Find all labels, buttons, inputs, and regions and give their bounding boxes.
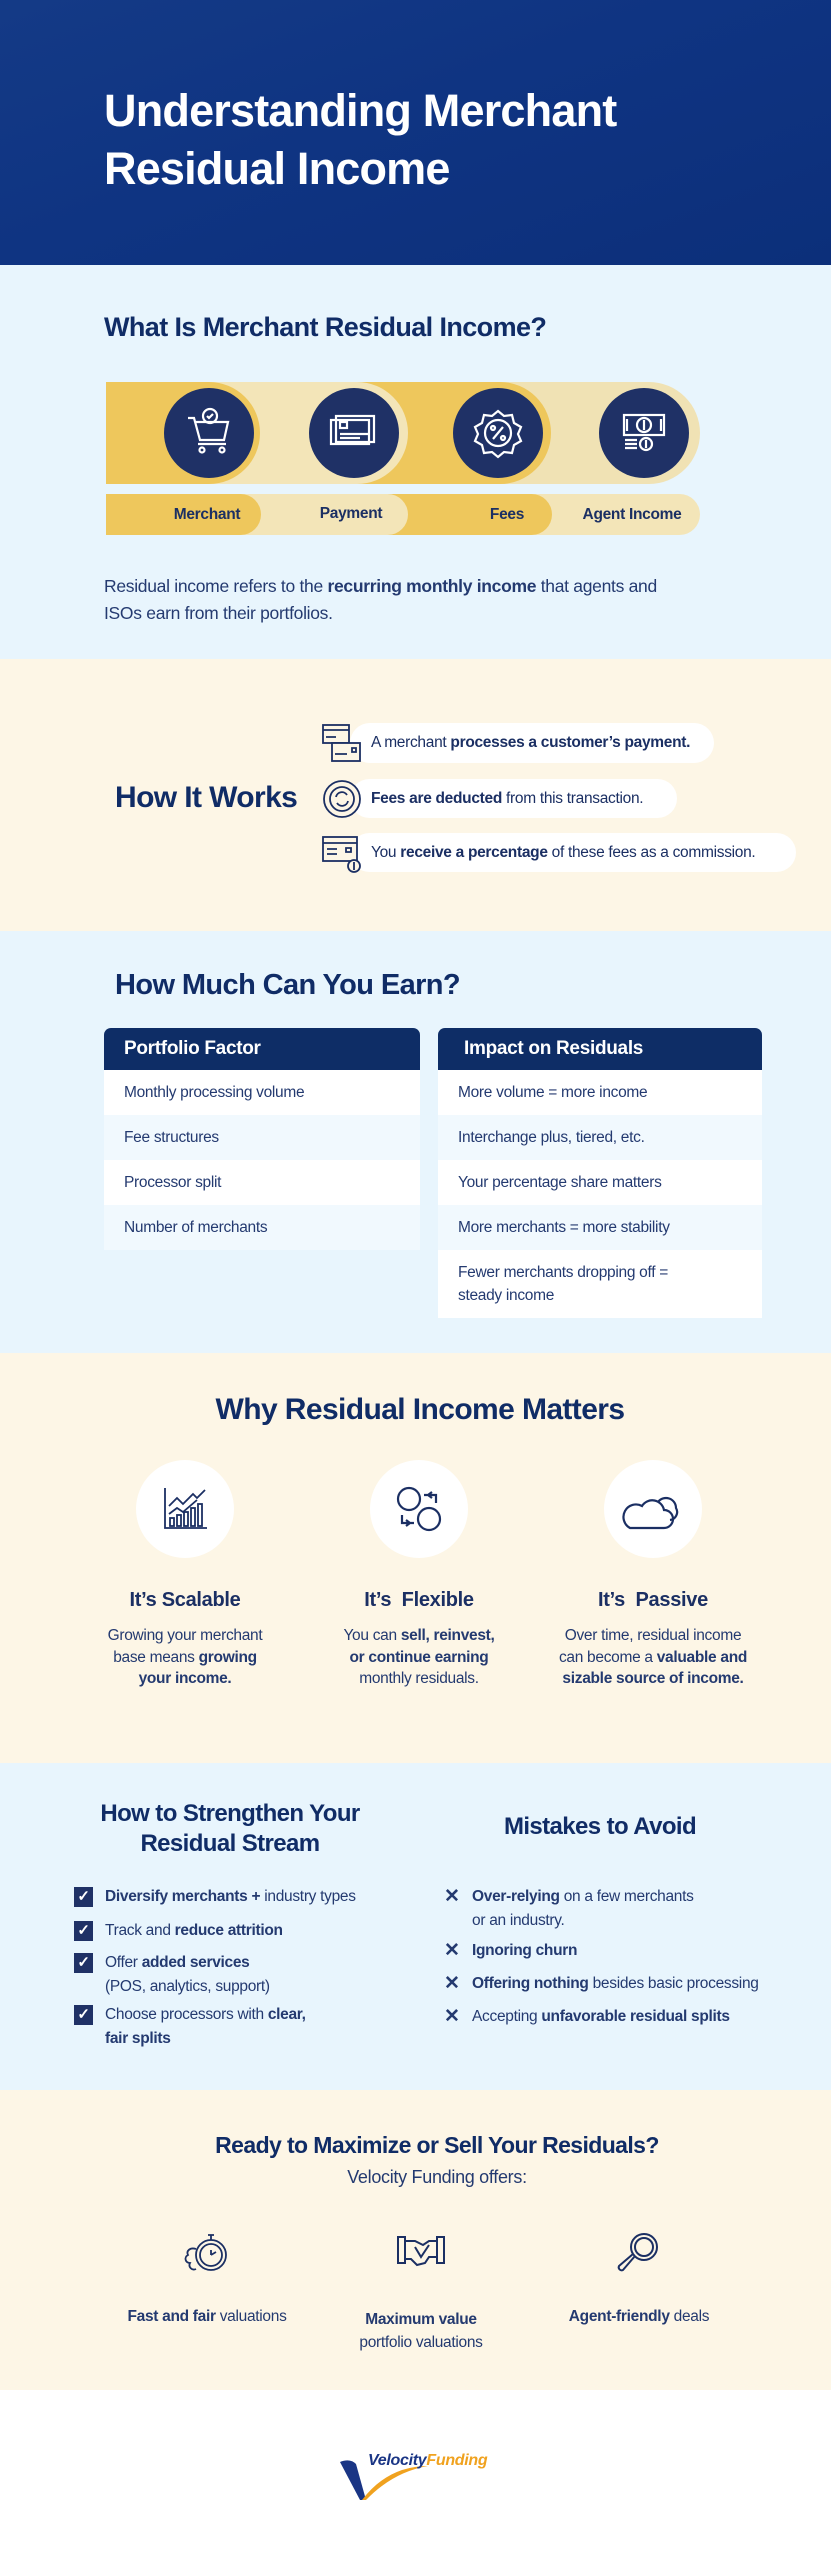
check item 4: fair splits [105,2030,171,2047]
heading: strengthen [100,1800,360,1857]
mistake 4: ✕ [444,2006,460,2027]
heading: Why Residual Income Matters [216,1393,624,1426]
icon: exchange circles [370,1460,468,1558]
mistake 1 [444,1886,694,1929]
table: portfolio factor: Number of merchants [124,1218,267,1236]
offer: fast: Fast and fair valuations [127,2308,287,2325]
card: scalable: base means growing [113,1648,257,1666]
table: impact on residuals: More volume = more income [458,1084,647,1100]
card: flexible: It’s Flexible [364,1589,474,1611]
card: passive: sizable source of income. [562,1670,744,1687]
label: fees: Fees [490,506,524,523]
mistake 2 [444,1940,577,1961]
offer: agent-friendly [569,2233,709,2325]
heading: mistakes: Mistakes to Avoid [504,1813,696,1840]
icon: handshake [397,2236,445,2266]
section: strengthen & mistakes [0,1763,831,2090]
check item 3: Offer added services [105,1954,250,1971]
icon: cards [322,724,361,762]
cta heading: Ready to Maximize or Sell Your Residuals? [215,2132,659,2158]
table: impact on residuals: Your percentage share matters [458,1174,662,1190]
step 3 [322,833,796,873]
heading: strengthen: Residual Stream [140,1830,320,1857]
header banner [0,0,831,265]
table: impact on residuals: Fewer merchants dropping off = [458,1264,668,1281]
table: impact on residuals [438,1028,762,1318]
mistake 2: Ignoring churn [472,1942,577,1959]
label band [106,494,700,535]
step 3: You receive a percentage of these fees as a commission. [371,844,755,861]
step 2 [323,779,677,818]
icon: money [599,388,689,478]
offer: fast [127,2234,287,2325]
offer: agent-friendly: Agent-friendly deals [569,2308,709,2325]
section: what is merchant residual income [0,265,831,659]
card: flexible [343,1460,495,1687]
mistake 1: Over-relying on a few merchants [472,1888,694,1905]
icon: shopping cart [164,388,254,478]
check item 4: ✓ [77,2006,90,2023]
check item 3 [74,1953,270,1995]
label: payment: Payment [320,505,382,522]
section: call to action [0,2090,831,2390]
icon: invoice dollar [322,836,361,873]
mistake 1: ✕ [444,1886,460,1907]
step 1 [322,723,714,763]
check item 3: (POS, analytics, support) [105,1978,270,1995]
icon: card [309,388,399,478]
checklist [74,1887,356,2047]
card: passive [559,1460,747,1687]
mistake 1: or an industry. [472,1912,565,1929]
mistake 3: ✕ [444,1973,460,1994]
mistakes list [444,1886,759,2027]
cta subheading: Velocity Funding offers: [347,2167,527,2187]
step 1: A merchant processes a customer’s payment. [371,734,690,751]
card: scalable: Growing your merchant [108,1627,262,1644]
card: scalable [108,1460,263,1687]
section: how it works [0,659,831,931]
step 2: Fees are deducted from this transaction. [371,790,643,807]
check item 3: ✓ [77,1954,90,1971]
icon: growth chart [136,1460,234,1558]
table: impact on residuals: steady income [458,1287,554,1304]
logo: velocity funding: VelocityFunding [368,2452,487,2469]
section: how much can you earn [0,931,831,1353]
card: flexible: or continue earning [350,1648,488,1666]
label: agent income: Agent Income [583,506,681,523]
flow diagram band [106,382,700,484]
card: passive: can become a valuable and [559,1648,747,1666]
table: portfolio factor: Processor split [124,1174,221,1190]
check item 4: Choose processors with clear, [105,2006,306,2023]
check item 2: ✓ [77,1922,90,1939]
table: portfolio factor: Monthly processing volume [124,1084,304,1100]
card: scalable: It’s Scalable [130,1589,240,1611]
table: impact on residuals: Interchange plus, tiered, etc. [458,1128,645,1146]
logo: velocity funding [340,2452,488,2500]
check item 1: Diversify merchants + industry types [105,1888,356,1905]
heading: How It Works [115,781,297,814]
check item 2: Track and reduce attrition [105,1922,283,1939]
icon: magnifier [618,2233,658,2272]
title: Understanding Merchant [104,85,616,136]
table: portfolio factor: Portfolio Factor [124,1038,261,1059]
icon: refresh badge [323,780,361,818]
table: impact on residuals: More merchants = more stability [458,1218,670,1236]
heading: What Is Merchant Residual Income? [104,312,546,342]
icon: percent badge [453,388,543,478]
card: flexible: You can sell, reinvest, [343,1627,495,1644]
heading: How Much Can You Earn? [115,969,460,1001]
offer: maximum value [359,2236,483,2351]
card: flexible: monthly residuals. [359,1670,479,1687]
mistake 3: Offering nothing besides basic processing [472,1975,759,1992]
icon: clouds [604,1460,702,1558]
check item 1: ✓ [77,1888,90,1905]
section: why residual income matters [0,1353,831,1763]
table: portfolio factor: Fee structures [124,1128,219,1146]
table: portfolio factor [104,1028,420,1250]
check item 4 [74,2005,306,2047]
card: passive: Over time, residual income [565,1627,741,1644]
offer: maximum value: Maximum value [365,2311,477,2328]
heading: strengthen: How to Strengthen Your [100,1800,360,1827]
title [104,85,617,194]
card: scalable: your income. [139,1670,231,1687]
label: merchant: Merchant [174,506,240,523]
table: impact on residuals: Impact on Residuals [464,1038,643,1059]
title: Residual Income [104,143,450,194]
definition text: Residual income refers to the recurring monthly income that agents and ISOs earn from their portfolios. [104,576,657,623]
icon: stopwatch [184,2234,227,2271]
card: passive: It’s Passive [598,1589,708,1611]
mistake 4: Accepting unfavorable residual splits [472,2008,730,2025]
offer: maximum value: portfolio valuations [359,2334,483,2351]
mistake 2: ✕ [444,1940,460,1961]
